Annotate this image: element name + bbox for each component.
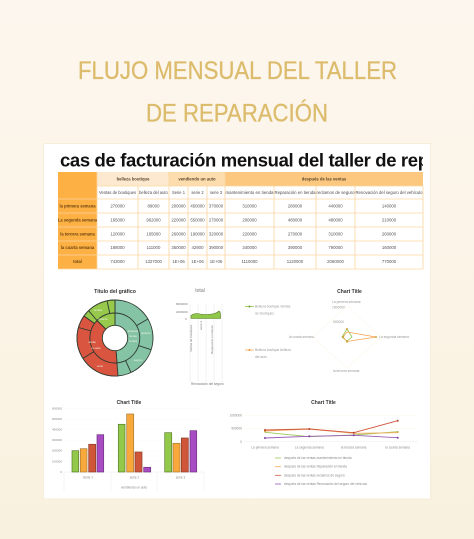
bar chart title: Chart Title xyxy=(117,400,142,406)
table row labels: la tercera semana xyxy=(60,232,96,236)
table values: 440000 xyxy=(328,204,343,208)
area chart series xyxy=(191,311,221,318)
title: DE REPARACIÓN xyxy=(146,98,328,128)
donut chart xyxy=(77,289,153,376)
table values: 962000 xyxy=(146,218,161,222)
panel: spreadsheet sheet xyxy=(44,144,430,499)
bar chart x labels: vendiendo un auto xyxy=(121,486,147,490)
table values: 310000 xyxy=(242,204,257,208)
table values xyxy=(110,204,397,264)
area chart axis labels: 8000000 xyxy=(176,302,188,306)
table row labels: total xyxy=(73,259,82,264)
table values: 310000 xyxy=(328,232,343,236)
radar labels: 1500000 xyxy=(332,306,345,310)
table values: 160000 xyxy=(382,245,397,250)
radar labels xyxy=(289,300,409,373)
bar chart x labels xyxy=(83,476,186,490)
radar legend: Belleza boutique belleza xyxy=(255,348,291,352)
line chart x labels: la cuarta semana xyxy=(385,446,410,450)
bar chart x labels: serie 3 xyxy=(176,476,186,480)
table values: 550000 xyxy=(190,218,205,222)
line chart legend xyxy=(275,456,367,486)
table xyxy=(58,172,423,269)
radar guides xyxy=(313,306,381,368)
line chart title: Chart Title xyxy=(311,400,336,406)
line chart legend: después de las ventas reclamos de seguro xyxy=(284,473,345,477)
table column headers: serie 2 xyxy=(191,190,204,195)
table values: 260000 xyxy=(382,232,397,236)
donut segment labels: seguro xyxy=(134,358,143,362)
table column headers: serie 3 xyxy=(210,190,223,195)
table values: 140000 xyxy=(382,204,397,208)
table values: 790000 xyxy=(328,245,343,250)
line chart x labels: La primera semana xyxy=(251,446,279,450)
donut segment labels: un auto xyxy=(91,346,101,350)
line chart legend: después de las ventas mantenimiento en tienda xyxy=(284,456,352,460)
table values: 1E+06 xyxy=(210,259,223,264)
radar labels: la cuarta semana xyxy=(289,335,314,339)
area chart axis labels xyxy=(176,302,224,386)
table values: 165000 xyxy=(146,232,161,236)
bar chart y axis: 0 xyxy=(60,470,62,474)
area chart axis labels: Renovación del seguro xyxy=(191,382,224,386)
table values: 450000 xyxy=(190,204,205,208)
line chart y axis: 1000000 xyxy=(230,414,242,418)
table values: 220000 xyxy=(242,232,257,236)
table values: 270000 xyxy=(288,232,303,236)
donut segment labels: ventas xyxy=(94,308,103,312)
table column headers: Serie 1 xyxy=(172,190,186,195)
radar labels: la tercera semana xyxy=(333,369,360,373)
table values: 350000 xyxy=(171,245,186,250)
title: FLUJO MENSUAL DEL TALLER xyxy=(78,57,397,85)
table column headers: Ventas de boutiques xyxy=(99,190,136,195)
area chart rotated labels: Reparación en tienda xyxy=(210,325,214,354)
table column headers: belleza del auto xyxy=(139,190,169,195)
table group headers: belleza boutique xyxy=(117,176,150,182)
area chart rotated labels: serie 2 xyxy=(199,321,203,330)
table row labels xyxy=(58,204,98,264)
line chart xyxy=(230,400,418,486)
donut segment labels: serie xyxy=(97,364,103,368)
radar labels: La segunda semana xyxy=(379,335,409,339)
table values: 188000 xyxy=(110,245,125,250)
radar labels: 500000 xyxy=(333,320,344,324)
bar chart xyxy=(52,400,204,491)
spreadsheet heading: cas de facturación mensual del taller de rep xyxy=(60,150,429,170)
table values: 120000 xyxy=(110,232,125,236)
title xyxy=(78,57,397,128)
table values: 1E+06 xyxy=(191,259,204,264)
table values: 1327000 xyxy=(145,259,162,264)
bars: serie 1 xyxy=(72,435,104,472)
bars: serie 3 xyxy=(165,431,197,472)
table values: 480000 xyxy=(288,218,303,222)
table values: 270000 xyxy=(209,218,224,222)
table values: 390000 xyxy=(209,245,224,250)
table values: 370000 xyxy=(209,204,224,208)
table group headers: después de las ventas xyxy=(302,176,347,182)
table values: 320000 xyxy=(209,232,224,236)
area chart: total xyxy=(176,288,224,386)
area chart axis labels: 2000000 xyxy=(176,310,188,314)
table group headers xyxy=(117,176,347,182)
line series xyxy=(265,421,398,438)
table row labels: La segunda semana xyxy=(58,218,98,222)
table values: 1120000 xyxy=(287,259,304,264)
table values: 89000 xyxy=(148,204,160,208)
table values: 111000 xyxy=(147,245,161,250)
bar chart y axis: 200000 xyxy=(52,449,62,453)
bar chart x labels: serie 2 xyxy=(130,476,140,480)
donut segment labels: belleza xyxy=(99,317,108,321)
line chart x labels: La segunda semana xyxy=(295,446,324,450)
table values: 200000 xyxy=(171,204,186,208)
table grid xyxy=(58,172,423,269)
bar chart y axis: 400000 xyxy=(52,428,62,432)
table values: 210000 xyxy=(382,218,397,222)
bar chart x labels: Serie 1 xyxy=(83,476,93,480)
bars: serie 2 xyxy=(118,414,151,472)
donut segment labels: después xyxy=(128,329,139,333)
bar chart y axis: 500000 xyxy=(52,417,62,421)
table column headers xyxy=(99,190,423,195)
table values: 190000 xyxy=(190,232,205,236)
bar chart y axis xyxy=(52,406,62,474)
bar chart y axis: 100000 xyxy=(52,459,62,463)
donut title: Título del gráfico xyxy=(94,289,136,295)
table group headers: vendiendo un auto xyxy=(178,176,216,182)
table values: 770000 xyxy=(382,259,397,264)
table row labels: la primera semana xyxy=(60,204,96,208)
line chart y axis xyxy=(230,414,242,444)
bar chart y axis: 600000 xyxy=(52,406,62,410)
line series markers xyxy=(264,420,399,439)
donut segment labels: vende xyxy=(88,340,96,344)
donut segment labels: de las xyxy=(129,334,137,338)
radar legend: del auto xyxy=(255,355,267,359)
donut segment labels xyxy=(88,308,151,368)
table values: 1110000 xyxy=(241,259,258,264)
line chart y axis: 0 xyxy=(240,440,242,444)
table column headers: mantenimiento en tienda xyxy=(226,190,274,195)
donut segment labels: ventas xyxy=(129,339,138,343)
area chart axis labels: 0 xyxy=(185,317,187,321)
table values: 270000 xyxy=(110,204,125,208)
donut rings xyxy=(77,300,153,376)
table column headers: Renovación del seguro del vehículo xyxy=(356,190,423,195)
radar labels: La primera semana xyxy=(332,300,361,304)
table values: 220000 xyxy=(171,218,186,222)
line chart x labels xyxy=(251,446,410,450)
table values: 280000 xyxy=(288,204,303,208)
radar legend xyxy=(245,304,291,359)
line chart legend: después de las ventas Reparación en tienda xyxy=(284,465,347,469)
table row labels: la cuarta semana xyxy=(61,245,95,250)
table values: 42900 xyxy=(192,245,204,250)
table values: 2060000 xyxy=(327,259,344,264)
table values: 260000 xyxy=(171,232,186,236)
table header fills xyxy=(58,172,423,269)
area chart grid xyxy=(190,304,222,382)
area chart rotated labels xyxy=(189,321,214,354)
table values: 1E+06 xyxy=(172,259,185,264)
table values: 390000 xyxy=(288,245,303,250)
radar chart xyxy=(245,289,409,373)
radar series xyxy=(342,329,352,341)
area chart rotated labels: Ventas de boutiques xyxy=(189,324,193,352)
table values: 340000 xyxy=(242,245,257,250)
table values: 165000 xyxy=(110,218,125,222)
table values: 743000 xyxy=(110,259,125,264)
bar chart grid xyxy=(64,408,204,461)
table values: 200000 xyxy=(242,218,257,222)
radar legend: Belleza boutique Ventas xyxy=(255,304,291,308)
line chart grid xyxy=(244,415,418,428)
donut segment labels: reparac. xyxy=(141,331,151,335)
bar chart y axis: 300000 xyxy=(52,438,62,442)
radar title: Chart Title xyxy=(337,289,362,295)
table column headers: Reparación en tienda xyxy=(274,190,316,195)
area chart title: total xyxy=(195,288,205,294)
line chart x labels: la tercera semana xyxy=(341,446,367,450)
radar legend: de boutiques xyxy=(255,312,274,316)
line chart legend: después de las ventas Renovación del seguro del vehículo xyxy=(284,482,367,486)
line chart y axis: 500000 xyxy=(231,426,242,430)
table column headers: reclamos de seguro xyxy=(316,190,355,195)
table values: 480000 xyxy=(328,218,343,222)
